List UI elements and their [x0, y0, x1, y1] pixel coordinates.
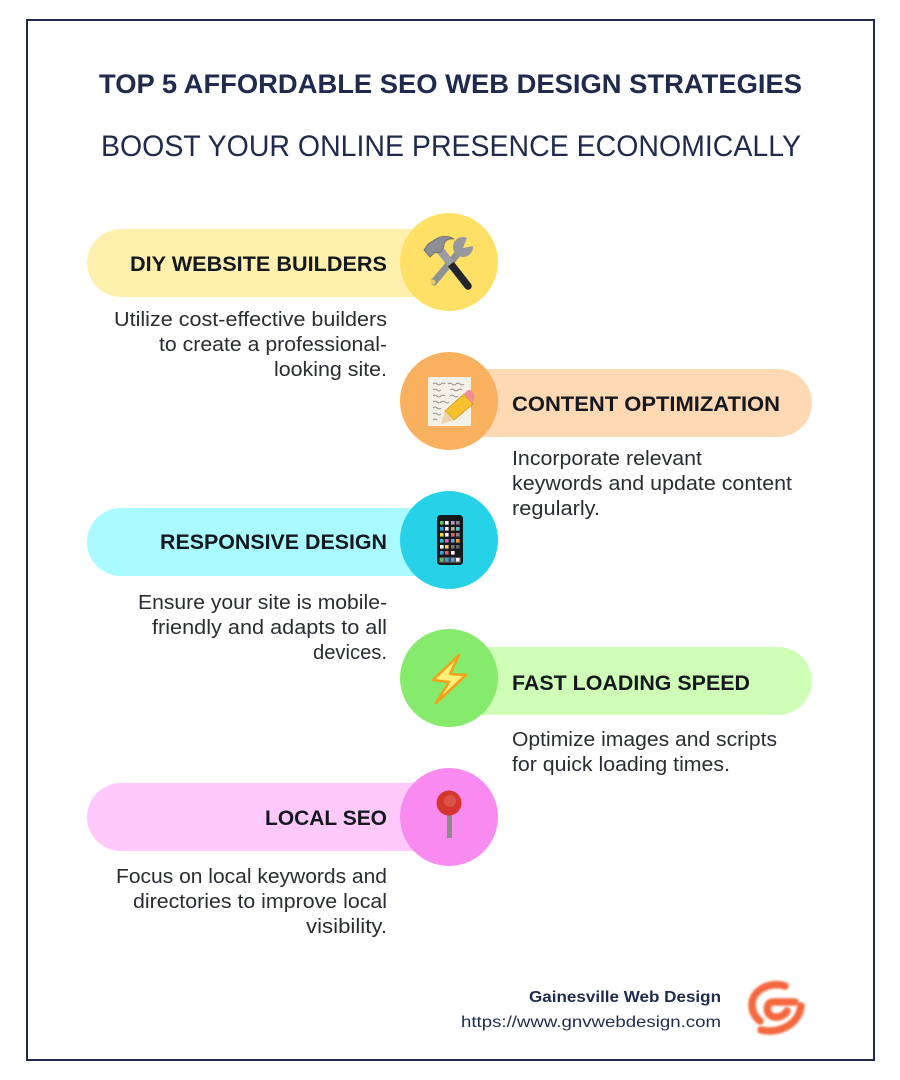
subtitle: BOOST YOUR ONLINE PRESENCE ECONOMICALLY [101, 130, 801, 163]
description: DIY website builders: looking site. [274, 359, 387, 381]
title: TOP 5 AFFORDABLE SEO WEB DESIGN STRATEGIES [99, 69, 802, 99]
icon: lightning bolt [433, 655, 466, 703]
icon: memo and pencil [428, 377, 475, 426]
description: fast loading speed [512, 729, 777, 776]
description: responsive design: Ensure your site is mobile- [138, 592, 387, 614]
description: content optimization [512, 448, 792, 520]
heading: local SEO: LOCAL SEO [265, 807, 387, 830]
panel: responsive design [87, 491, 498, 664]
heading: responsive design: RESPONSIVE DESIGN [160, 531, 387, 554]
pill: content optimization [432, 369, 812, 437]
heading: content optimization: CONTENT OPTIMIZATION [512, 393, 780, 416]
pill: responsive design [87, 508, 467, 576]
description: DIY website builders [114, 309, 387, 381]
pill: fast loading speed [432, 647, 812, 715]
pill: DIY website builders [87, 229, 467, 297]
icon circle: cyan [400, 491, 498, 589]
heading: DIY website builders: DIY WEBSITE BUILDERS [130, 253, 387, 276]
footer: website url: https://www.gnvwebdesign.com [461, 1014, 721, 1031]
panel: DIY website builders [87, 213, 498, 381]
description: content optimization: regularly. [512, 498, 600, 520]
panel: local SEO [87, 768, 498, 938]
description: content optimization: Incorporate relevant [512, 448, 702, 470]
description: fast loading speed: Optimize images and scripts [512, 729, 777, 751]
icon circle: pink [400, 768, 498, 866]
icon: round pushpin [436, 790, 462, 838]
description: local SEO: visibility. [306, 916, 387, 938]
heading: fast loading speed: FAST LOADING SPEED [512, 672, 750, 695]
icon: smartphone [437, 515, 463, 565]
panel: content optimization [400, 352, 812, 520]
icon circle: green [400, 629, 498, 727]
description: local SEO: Focus on local keywords and [116, 866, 387, 888]
panel: fast loading speed [400, 629, 812, 776]
footer: brand name: Gainesville Web Design [529, 989, 721, 1006]
description: responsive design [138, 592, 387, 664]
description: DIY website builders: Utilize cost-effective builders [114, 309, 387, 331]
logo: G mark [752, 985, 801, 1031]
description: content optimization: keywords and update content [512, 473, 792, 495]
description: local SEO: directories to improve local [133, 891, 387, 913]
description: local SEO [116, 866, 387, 938]
description: responsive design: friendly and adapts to all [152, 617, 387, 639]
pill: local SEO [87, 783, 467, 851]
icon: hammer and wrench [424, 235, 478, 286]
description: DIY website builders: to create a professional- [159, 334, 387, 356]
description: fast loading speed: for quick loading times. [512, 754, 730, 776]
description: responsive design: devices. [313, 642, 387, 664]
icon circle: orange [400, 352, 498, 450]
icon circle: yellow [400, 213, 498, 311]
